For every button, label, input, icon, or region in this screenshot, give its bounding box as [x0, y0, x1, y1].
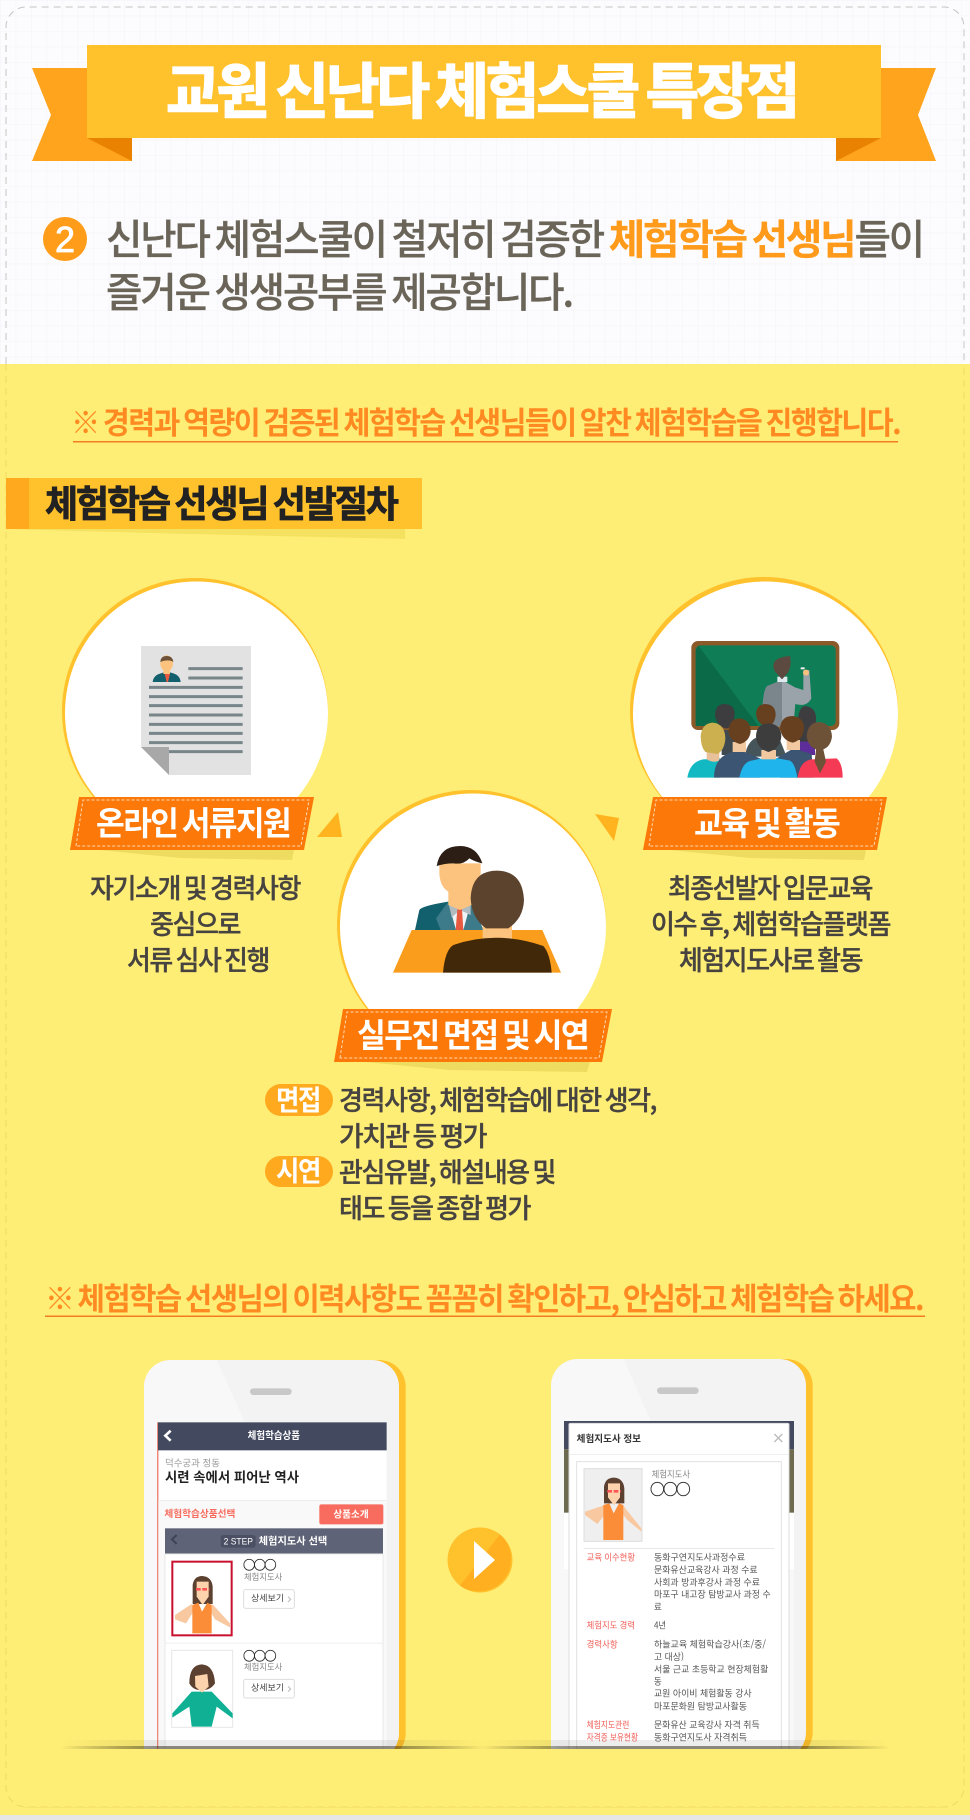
teacher detail labels: 체험지도관련 — [587, 1717, 629, 1731]
teacher 1 info: 체험지도사 — [244, 1571, 282, 1583]
teacher 2 info: 상세보기 — [251, 1682, 284, 1694]
text: interview description: 가치관 등 평가 — [339, 1115, 488, 1154]
label: online application — [70, 797, 314, 860]
teacher 2 info: ○○○ — [243, 1646, 276, 1664]
teacher 1 info: ○○○ — [243, 1556, 276, 1574]
intro statement: 즐거운 생생공부를 제공합니다. — [106, 259, 572, 319]
app header — [158, 1422, 387, 1450]
teacher detail labels: 체험지도 경력 — [587, 1618, 635, 1632]
numbered badge 2 — [43, 217, 87, 261]
teacher detail values: 동 — [654, 1674, 662, 1688]
teacher photo: orange dress — [172, 1562, 232, 1635]
teacher detail values: 사회과 방과후강사 과정 수료 — [654, 1574, 760, 1588]
step circle: interview and demonstration — [337, 790, 606, 1060]
text: training description — [651, 867, 891, 978]
text: online application description: 자기소개 및 경력사항 — [90, 867, 301, 906]
label: online application: 온라인 서류지원 — [96, 797, 290, 845]
teacher detail values: 교원 아이비 체험활동 강사 — [654, 1686, 752, 1700]
teacher detail labels: 경력사항 — [587, 1637, 618, 1651]
teacher detail values: 문화유산 교육강사 자격 취득 — [654, 1717, 760, 1731]
icon: resume document — [141, 646, 251, 775]
phone: teacher selection screen — [144, 1360, 406, 1760]
step bar: 체험지도사 선택 — [259, 1532, 327, 1547]
text: online application description: 중심으로 — [150, 903, 241, 942]
teacher photo: teal shirt — [172, 1650, 233, 1727]
teacher portrait — [584, 1469, 642, 1541]
text: interview description: 경력사항, 체험학습에 대한 생각, — [339, 1079, 656, 1118]
label: interview and demonstration — [334, 1009, 612, 1072]
text: interview description: 시연 — [276, 1150, 320, 1190]
teacher detail values: 동화구연지도사 자격취득 — [654, 1729, 747, 1743]
icon: interview — [393, 846, 561, 973]
teacher name: 체험지도사 — [652, 1467, 691, 1480]
step circle: online application — [62, 578, 328, 844]
product title: 덕수궁과 정동 — [165, 1455, 220, 1469]
label: interview and demonstration: 실무진 면접 및 시연 — [357, 1009, 588, 1057]
step bar: 2 STEP — [224, 1536, 253, 1546]
modal dialog: 체험지도사 정보 — [577, 1431, 641, 1445]
teacher detail labels — [587, 1550, 638, 1743]
teacher 1 info — [243, 1556, 294, 1608]
note: check teacher history: ※ 체험학습 선생님의 이력사항도 꼼꼼히 확인하고, 안심하고 체험학습 하세요. — [45, 1274, 923, 1319]
teacher detail values: 4년 — [654, 1618, 666, 1632]
text: interview description: 면접 — [276, 1079, 320, 1119]
arrow: step 2 to step 1 — [317, 812, 342, 837]
text: training description: 체험지도사로 활동 — [679, 939, 863, 978]
teacher detail values: 동화구연지도사과정수료 — [654, 1550, 745, 1564]
phone: teacher information screen — [551, 1359, 813, 1762]
app header: 체험학습상품 — [248, 1427, 300, 1442]
teacher name — [650, 1467, 691, 1499]
text: interview description: 태도 등을 종합 평가 — [339, 1187, 532, 1226]
teacher 1 info: 상세보기 — [251, 1592, 284, 1604]
teacher detail values: 마포구 내고장 탐방교사 과정 수 — [654, 1587, 771, 1601]
label: training and activity: 교육 및 활동 — [694, 797, 839, 845]
teacher 2 info: 체험지도사 — [244, 1661, 282, 1673]
product selection row: 상품소개 — [333, 1506, 369, 1520]
title ribbon — [32, 44, 936, 161]
teacher detail labels: 교육 이수현황 — [587, 1550, 635, 1564]
teacher detail values: 문화유산교육강사 과정 수료 — [654, 1562, 758, 1576]
intro statement — [106, 206, 923, 319]
teacher detail values: 마포문화원 탐방교사활동 — [654, 1698, 747, 1712]
text: interview description: 관심유발, 해설내용 및 — [339, 1151, 555, 1190]
modal dialog — [569, 1423, 789, 1762]
teacher detail labels: 자격증 보유현황 — [587, 1729, 638, 1743]
text: interview description — [265, 1079, 656, 1226]
product title — [165, 1455, 299, 1486]
teacher detail values: 료 — [654, 1599, 662, 1613]
label: training and activity — [643, 797, 887, 860]
arrow: step 2 to step 3 — [595, 814, 619, 841]
icon: classroom with teacher — [687, 641, 843, 778]
text: online application description: 서류 심사 진행 — [127, 939, 269, 978]
teacher detail values: 하늘교육 체험학습강사(초/중/ — [654, 1637, 766, 1651]
teacher detail values: 고 대상) — [654, 1649, 684, 1663]
text: training description: 최종선발자 입문교육 — [668, 867, 873, 906]
text: training description: 이수 후, 체험학습플랫폼 — [651, 903, 891, 942]
product selection row — [164, 1504, 383, 1524]
note: verified teachers: ※ 경력과 역량이 검증된 체험학습 선생님들이 알찬 체험학습을 진행합니다. — [71, 398, 900, 443]
teacher detail values: 서울 근교 초등학교 현장체험활 — [654, 1661, 769, 1675]
product title: 시련 속에서 피어난 역사 — [165, 1466, 299, 1486]
teacher name: ○○○ — [650, 1478, 690, 1499]
teacher detail values — [654, 1550, 771, 1743]
numbered badge 2: 2 — [55, 219, 75, 260]
step bar — [165, 1528, 383, 1554]
teacher 2 info — [243, 1646, 294, 1698]
product selection row: 체험학습상품선택 — [164, 1506, 235, 1520]
text: online application description — [90, 867, 301, 978]
section heading bar: 체험학습 선생님 선발절차 — [45, 474, 399, 528]
intro statement: 신난다 체험스쿨이 철저히 검증한 체험학습 선생님들이 — [106, 206, 923, 266]
icon: play arrow — [448, 1528, 512, 1592]
step circle: training and activity — [630, 577, 898, 846]
title ribbon: 교원 신난다 체험스쿨 특장점 — [166, 44, 797, 131]
